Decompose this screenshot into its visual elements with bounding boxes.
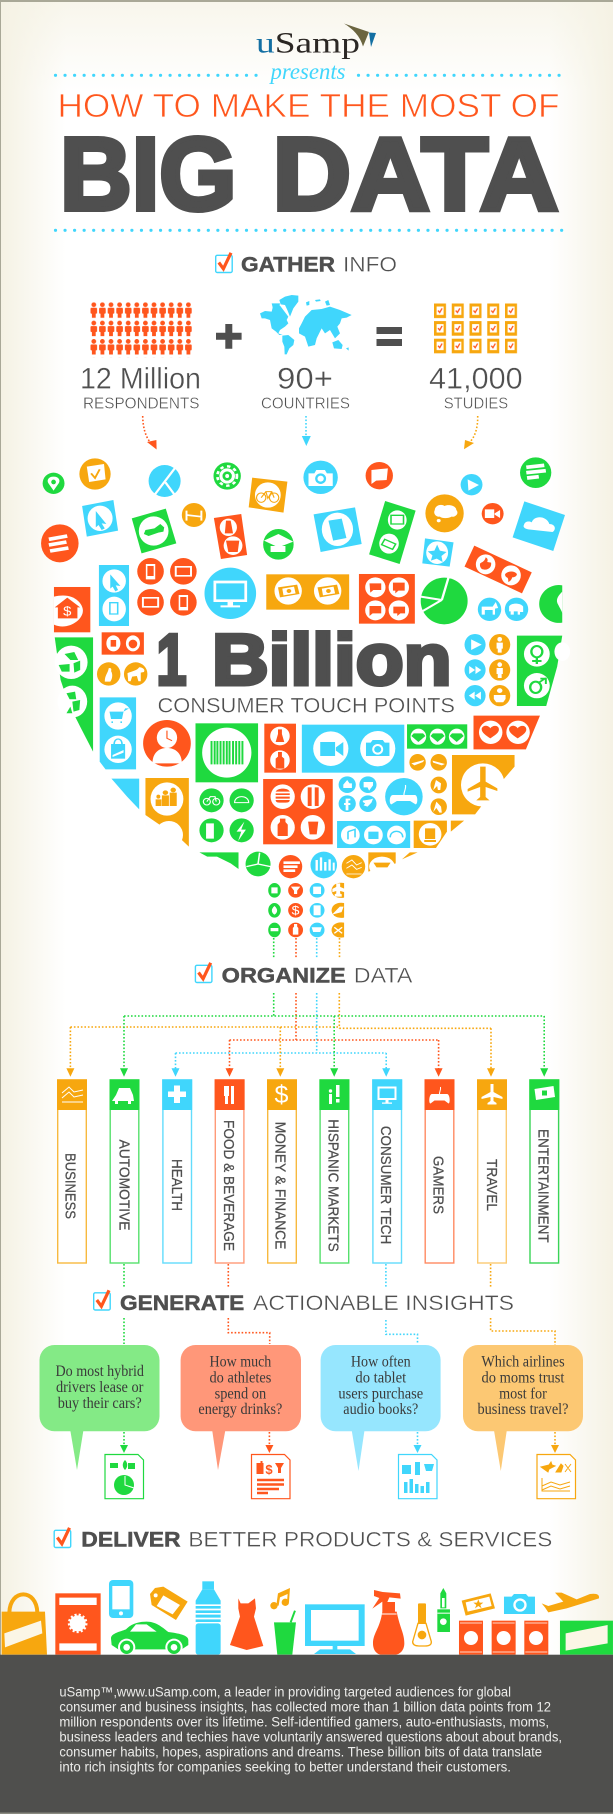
product: green box bbox=[560, 1621, 613, 1655]
icon: family tile bbox=[145, 778, 189, 849]
column: travel: TRAVEL bbox=[483, 1159, 499, 1211]
icon: list bbox=[520, 457, 551, 488]
report: green bbox=[105, 1454, 144, 1499]
column: gamers bbox=[424, 1079, 454, 1263]
icon: house tile: $ bbox=[63, 605, 72, 618]
icon: speech bbox=[366, 462, 393, 489]
footer text bbox=[59, 1685, 562, 1775]
column: gamers: GAMERS bbox=[430, 1156, 446, 1214]
icon: train tile bbox=[414, 821, 447, 848]
icon: monitor bbox=[204, 568, 256, 619]
product strip left bbox=[2, 1580, 296, 1656]
icon: amber shard bbox=[451, 821, 464, 832]
title line: HOW TO MAKE THE MOST OF bbox=[58, 87, 560, 124]
column: business: BUSINESS bbox=[61, 1153, 77, 1219]
icon: person clock bbox=[143, 720, 191, 767]
title: BIG DATA bbox=[60, 116, 558, 232]
icon: bottles tile bbox=[264, 724, 296, 773]
icon: gamepad bbox=[385, 778, 423, 815]
footer text: business leaders and techies have voluntarily answered questions about about brands, bbox=[59, 1730, 562, 1745]
arrow: countries bbox=[302, 416, 311, 446]
column: money and finance: $ bbox=[275, 1081, 289, 1109]
icon: thumbs tile bbox=[465, 546, 532, 593]
column: consumer tech: CONSUMER TECH bbox=[377, 1126, 393, 1244]
title: BIG DATA: DATA bbox=[272, 116, 558, 232]
icon: small circles, column red bbox=[288, 883, 303, 937]
product: box bbox=[55, 1593, 101, 1655]
product: spray bottle bbox=[372, 1590, 404, 1655]
bubble: airlines: Which airlines bbox=[481, 1354, 565, 1371]
column: automotive: AUTOMOTIVE bbox=[115, 1140, 131, 1231]
icon: thought cloud bbox=[425, 494, 464, 532]
icon: shopping tile bbox=[100, 697, 136, 769]
product strip right bbox=[305, 1588, 613, 1655]
stat: 12 million respondents: 12 Million bbox=[80, 362, 201, 395]
arrow: respondents bbox=[143, 416, 157, 450]
icon: cyan shard bbox=[111, 779, 139, 809]
logo: uSamp bbox=[256, 24, 376, 60]
product: monitor bbox=[305, 1604, 365, 1654]
icon: bicycle bbox=[249, 478, 287, 513]
column: hispanic markets bbox=[319, 1079, 349, 1263]
icon: checklist bbox=[79, 458, 111, 490]
column: food and beverage bbox=[215, 1079, 245, 1263]
product: cans bbox=[459, 1621, 548, 1655]
product: bottle bbox=[196, 1581, 221, 1655]
icon: social circles bbox=[339, 776, 377, 812]
bubble: athletes: do athletes bbox=[210, 1370, 271, 1387]
icon: travel circles bbox=[409, 754, 447, 815]
heading: generate actionable insights bbox=[94, 1290, 514, 1315]
connectors: red network bbox=[226, 993, 443, 1077]
report: red bbox=[252, 1454, 290, 1499]
heading: organize data bbox=[195, 963, 413, 988]
icon: play bbox=[461, 474, 482, 495]
icon: vehicle circles bbox=[199, 788, 254, 842]
icon: video and camera tile bbox=[302, 725, 404, 773]
stat: 90+ countries: COUNTRIES bbox=[261, 395, 350, 412]
icon: small circles, column cyan bbox=[310, 883, 325, 937]
heading: gather info bbox=[216, 253, 397, 277]
bubble: athletes: energy drinks? bbox=[198, 1401, 283, 1418]
icon: cursor and mouse tile bbox=[99, 565, 129, 626]
product: ticket bbox=[462, 1593, 495, 1616]
icon: speech tile bbox=[359, 574, 415, 624]
heading: deliver better products and services bbox=[54, 1528, 552, 1552]
product: music note bbox=[270, 1588, 290, 1609]
icon: tickets tile bbox=[266, 574, 349, 610]
touch point icons: lower cluster bbox=[100, 697, 540, 938]
bubble: airlines: business travel? bbox=[478, 1401, 569, 1418]
icon: plane tile bbox=[452, 755, 515, 814]
column: hispanic markets: HISPANIC MARKETS bbox=[324, 1119, 340, 1252]
heading: gather info: INFO bbox=[343, 253, 397, 277]
arrows: bubbles to reports bbox=[120, 1432, 559, 1453]
plus sign bbox=[216, 324, 242, 349]
icon: travel glyphs bbox=[411, 760, 445, 813]
icon: world map bbox=[260, 295, 352, 354]
icon: pets bbox=[97, 662, 147, 686]
bubble: airlines: do moms trust bbox=[482, 1370, 565, 1387]
icon: dress and shirt tile bbox=[214, 514, 247, 559]
bubble: tablet users bbox=[321, 1345, 441, 1471]
column: health: HEALTH bbox=[168, 1159, 184, 1211]
icon: bed bbox=[182, 503, 206, 527]
touch point icons: upper cluster bbox=[41, 457, 570, 752]
icon: respondents grid bbox=[90, 302, 193, 357]
icon: gender and sign circles bbox=[465, 634, 510, 706]
product: car bbox=[111, 1622, 188, 1656]
icon: star tile bbox=[422, 538, 454, 567]
stat: 41,000 studies bbox=[429, 362, 523, 412]
connectors: amber network bbox=[66, 993, 495, 1077]
bubble: athletes: How much bbox=[210, 1354, 272, 1371]
title: 1 Billion: Billion bbox=[212, 621, 452, 701]
icon: small circles, column red: $ bbox=[292, 904, 300, 917]
stat: 90+ countries bbox=[261, 362, 350, 412]
footer text: uSamp™,www.uSamp.com, a leader in providing targeted audiences for global bbox=[59, 1685, 511, 1700]
icon: food tile bbox=[263, 779, 333, 844]
icon: small circles, column green bbox=[268, 883, 281, 937]
report: red: $ bbox=[265, 1462, 273, 1477]
bubble: tablet users: How often bbox=[351, 1354, 411, 1371]
bubble: airlines bbox=[463, 1345, 583, 1471]
product: cup bbox=[274, 1611, 296, 1655]
product: phone bbox=[109, 1580, 133, 1618]
stat: 12 million respondents bbox=[80, 362, 201, 412]
icon: bar chart bbox=[310, 852, 337, 878]
icon: appliance tile bbox=[102, 632, 144, 655]
icon: cropped green circle bbox=[539, 585, 562, 623]
footer panel bbox=[0, 1655, 613, 1814]
heading: organize data: ORGANIZE bbox=[222, 964, 346, 988]
icon: pie bbox=[149, 465, 181, 497]
icon: ship tile bbox=[368, 852, 418, 877]
icon: small pie bbox=[246, 852, 271, 876]
product: tag bbox=[150, 1587, 188, 1620]
heading: gather info: GATHER bbox=[241, 253, 335, 277]
icon: devices circles bbox=[137, 558, 197, 616]
title: 1 Billion: 1 bbox=[156, 621, 186, 701]
icon: video bbox=[482, 503, 504, 524]
icon: camera bbox=[303, 461, 338, 494]
connectors: columns to insights bbox=[124, 1264, 491, 1288]
bubble: athletes bbox=[181, 1345, 301, 1470]
icon: media tile bbox=[337, 821, 410, 848]
icon: graduation cap bbox=[263, 529, 294, 560]
connectors: cyan network bbox=[172, 993, 390, 1077]
column: entertainment bbox=[529, 1079, 559, 1263]
heading: deliver better products and services: BETTER PRODUCTS & SERVICES bbox=[188, 1528, 552, 1552]
column: money and finance bbox=[267, 1079, 297, 1263]
bubble: tablet users: audio books? bbox=[343, 1401, 418, 1418]
heading: deliver better products and services: DELIVER bbox=[81, 1528, 181, 1552]
logo: uSamp: uSamp bbox=[256, 27, 360, 60]
icon: house tile bbox=[54, 587, 90, 632]
icon: small circles, column amber bbox=[332, 883, 344, 938]
icon: pin bbox=[43, 473, 65, 494]
icon: donkey and elephant bbox=[478, 598, 528, 621]
divider bbox=[56, 229, 563, 232]
icon: hearts tile bbox=[474, 716, 540, 749]
product: bag bbox=[2, 1594, 47, 1655]
footer text: into rich insights for companies seeking to better understand their customers. bbox=[59, 1760, 511, 1775]
connectors: green network bbox=[120, 993, 548, 1077]
footer text: million respondents over its lifetime. Self-identified gamers, auto-enthusiasts, moms, bbox=[59, 1715, 549, 1730]
column: travel bbox=[477, 1079, 507, 1263]
stat: 12 million respondents: RESPONDENTS bbox=[83, 395, 200, 412]
equals sign bbox=[376, 327, 402, 346]
stat: 41,000 studies: 41,000 bbox=[429, 362, 523, 395]
icon: studies grid bbox=[434, 304, 518, 354]
icon: green shard bbox=[199, 852, 239, 869]
product: camera bbox=[504, 1594, 535, 1614]
title: BIG DATA: BIG bbox=[60, 116, 236, 232]
icon: barcode tile bbox=[196, 723, 258, 782]
column: automotive bbox=[110, 1079, 140, 1263]
heading: generate actionable insights: ACTIONABLE INSIGHTS bbox=[253, 1291, 514, 1315]
product: lipstick bbox=[437, 1588, 450, 1632]
icon: diamonds tile bbox=[407, 724, 467, 749]
icon: list red bbox=[41, 524, 79, 562]
arrow: studies bbox=[464, 416, 478, 449]
bubble: hybrid drivers: buy their cars? bbox=[58, 1395, 142, 1412]
stat: 90+ countries: 90+ bbox=[277, 362, 333, 395]
icon: recycle tile bbox=[55, 637, 93, 752]
icon: cards tile bbox=[369, 501, 416, 564]
icon: line chart bbox=[342, 855, 365, 878]
icon: cloud tile bbox=[513, 501, 565, 551]
stat: 41,000 studies: STUDIES bbox=[444, 395, 508, 412]
icon: male female tile bbox=[517, 636, 570, 706]
bubble: tablet users: users purchase bbox=[338, 1385, 423, 1402]
footer text: consumer and business insights, has collected more than 1 billion data points from 12 bbox=[59, 1700, 551, 1715]
column: consumer tech bbox=[372, 1079, 402, 1263]
report: amber bbox=[537, 1454, 576, 1499]
connectors: touch points to organize bbox=[274, 938, 340, 958]
column: business bbox=[57, 1079, 87, 1263]
product: nail polish bbox=[413, 1603, 431, 1646]
icon: pie chart bbox=[421, 578, 468, 624]
column: money and finance: MONEY & FINANCE bbox=[272, 1122, 288, 1250]
footer text: consumer habits, hopes, aspirations and dreams. These billion bits of data translate bbox=[59, 1745, 542, 1760]
column: food and beverage: FOOD & BEVERAGE bbox=[220, 1120, 236, 1251]
icon: cursor tile bbox=[82, 500, 118, 537]
bubble: hybrid drivers: drivers lease or bbox=[56, 1379, 144, 1396]
icon: small list bbox=[279, 855, 302, 878]
icon: car tile bbox=[132, 509, 176, 553]
subtitle: consumer touch points: CONSUMER TOUCH POINTS bbox=[158, 693, 455, 717]
report: cyan bbox=[398, 1454, 437, 1499]
presents label with dotted rules: presents bbox=[269, 59, 346, 84]
heading: organize data: DATA bbox=[354, 964, 413, 988]
bubble: hybrid drivers: Do most hybrid bbox=[55, 1363, 144, 1380]
product: dress bbox=[230, 1598, 263, 1650]
bubble: hybrid drivers bbox=[40, 1345, 160, 1470]
heading: generate actionable insights: GENERATE bbox=[120, 1291, 244, 1315]
connectors: insights to bubbles bbox=[124, 1318, 555, 1345]
bubble: airlines: most for bbox=[499, 1385, 548, 1402]
bubble: tablet users: do tablet bbox=[355, 1370, 407, 1387]
bubble: athletes: spend on bbox=[215, 1385, 266, 1402]
column: health bbox=[162, 1079, 192, 1263]
product: plane bbox=[542, 1593, 599, 1612]
icon: gear bbox=[213, 462, 241, 490]
icon: tablet tile bbox=[314, 507, 362, 552]
column: entertainment: ENTERTAINMENT bbox=[535, 1129, 551, 1243]
